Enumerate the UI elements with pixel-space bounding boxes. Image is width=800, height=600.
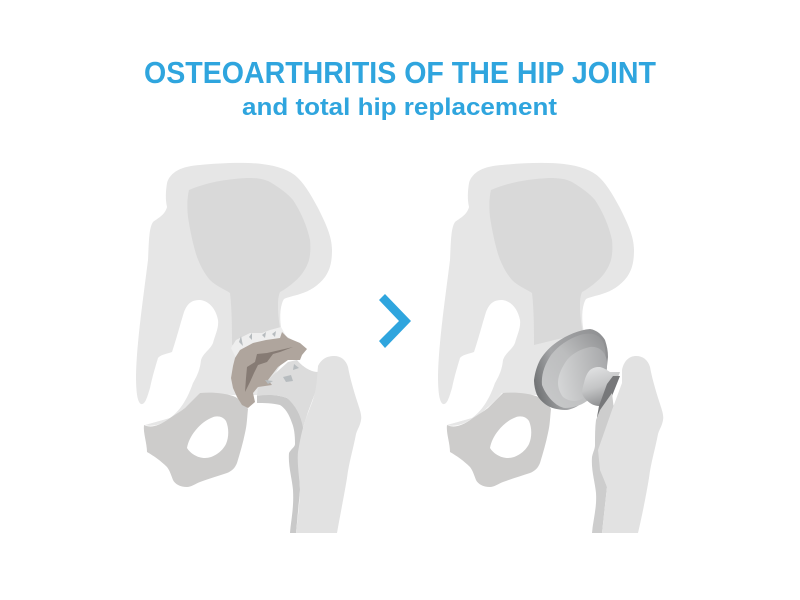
iliac wing xyxy=(489,178,612,345)
bone spurs and flecks xyxy=(239,331,299,384)
subtitle: and total hip replacement xyxy=(242,94,557,121)
femur shaft xyxy=(598,356,663,533)
femur cortex xyxy=(257,395,303,533)
implant neck xyxy=(582,367,620,406)
pelvis bone outline xyxy=(136,163,332,426)
cup face xyxy=(542,334,606,408)
panel: hip after replacement xyxy=(438,163,663,533)
pubic bone xyxy=(144,393,248,487)
damaged femoral head: dark erosion xyxy=(245,347,293,392)
pubic bone xyxy=(447,393,551,487)
title: OSTEOARTHRITIS OF THE HIP JOINT xyxy=(144,55,656,90)
stem shadow xyxy=(597,376,620,420)
femur shaft xyxy=(296,356,361,533)
cup rim xyxy=(534,329,608,410)
femoral neck xyxy=(257,360,318,428)
implant: acetabular cup xyxy=(534,329,620,420)
cup inner dome xyxy=(558,347,607,401)
degraded joint edge xyxy=(231,327,296,358)
panel: hip with osteoarthritis xyxy=(136,163,361,533)
pelvis bone outline xyxy=(438,163,634,426)
arrow: chevron xyxy=(379,294,411,348)
iliac wing xyxy=(187,178,310,345)
damaged femoral head: arthritic bone xyxy=(231,332,307,408)
femur cortex xyxy=(592,393,614,533)
